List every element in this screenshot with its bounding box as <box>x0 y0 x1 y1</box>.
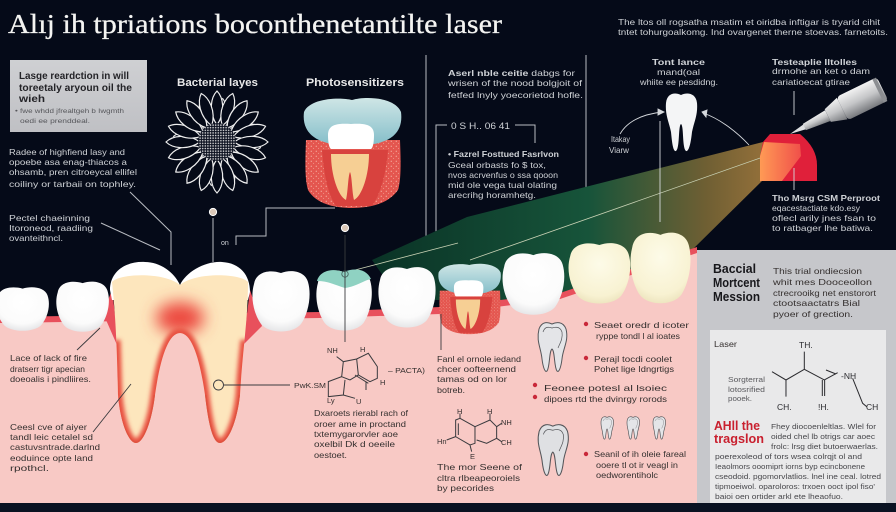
text block: card body: oided chel lb otrigs car aoec <box>771 432 875 441</box>
text block: handpiece note: drmohe an ket o dam <box>772 66 870 76</box>
heading: bacterial movement mission: Mortcent <box>713 276 761 290</box>
heading: photosensitizers: Photosensitizers <box>306 77 404 89</box>
text block: partial oxide: tamas od on lor <box>437 374 507 384</box>
laser label: Laser <box>714 339 737 349</box>
panel: intro box: wieh <box>18 94 45 105</box>
laser beam <box>372 142 763 300</box>
icon: laser handpiece <box>784 77 888 146</box>
text block: lace of lack: doeoalis i pindliires. <box>10 374 91 384</box>
text block: structure 2 caption: cltra rlbeapeoroiels <box>437 473 520 483</box>
text block: partial feature: Gceal orbasts fo $ tox, <box>448 160 546 170</box>
label: structure side note: pooek. <box>728 394 752 403</box>
chemical structure 3: CH. <box>777 402 792 412</box>
tooth 7 <box>503 253 564 315</box>
bullet list: Seaet oredr d icoter <box>594 320 689 330</box>
text block: coating layer <box>10 422 100 473</box>
text block: left description: coiliny or tarbaii on tophley. <box>9 179 136 189</box>
panel: right gray section <box>697 250 896 503</box>
text block: lace of lack: dratserr tigr apecian <box>10 364 85 374</box>
text block: partial feature: mid ole vega tual olating <box>448 180 557 190</box>
label: structure side note: Sorgterral <box>728 375 765 384</box>
tooth 5 with teal coating <box>316 270 372 330</box>
text block: left note: Pectel chaeinning <box>9 213 90 223</box>
text block: left description: opoebe asa enag-thiacos a <box>9 157 127 167</box>
text block: left description <box>9 147 137 189</box>
chemical structure 3: -NH <box>841 371 856 381</box>
text block: margin result: oflecl arily jnes fsan to <box>772 213 876 223</box>
tooth 4 <box>252 271 310 332</box>
text block: card body: baioi oen ortider arkl ete lheaofuo. <box>715 492 843 501</box>
bullet list: dipoes rtd the dvinrgy rorods <box>544 394 667 404</box>
text block: structure 2 caption: The mor Seene of <box>437 462 523 472</box>
bullet list: Perajl tocdi coolet <box>594 354 673 364</box>
chemical structure 1: H <box>380 378 385 387</box>
text block: right description: ctootsaactatrs Bial <box>773 298 860 308</box>
text block: card body: tipmoeiwol. oparoloros: trxoen ooct ipol fiso' <box>715 482 876 491</box>
text block: margin result: eqacestactiate kdo.esy <box>772 203 861 213</box>
text block: left description: Radee of highfiend lasy and <box>9 147 125 157</box>
icon: white tooth <box>666 94 697 151</box>
red heading <box>714 419 764 446</box>
chemical structure 1: – PACTA) <box>388 366 426 375</box>
text block: handpiece note <box>772 57 870 87</box>
chemical structure 1 <box>294 345 426 406</box>
label: structure side note: lotosrified <box>728 385 765 394</box>
chemical structure 2: NH <box>501 418 512 427</box>
text block: structure 1 caption: oroer ame in proctand <box>314 419 406 429</box>
chemical structure 2: Hn <box>437 437 447 446</box>
big tooth cross section <box>103 262 262 443</box>
text block: coating layer: Ceesl cve of aiyer <box>10 422 87 432</box>
red heading: AHll the <box>714 419 760 433</box>
text block: partial feature <box>448 149 559 200</box>
chemical structure 2 <box>437 407 512 461</box>
text block: top right intro: tntet tohurgoalkomg. Ind ovargenet therne stoevas. farnetoits. <box>618 27 888 37</box>
bullet list: Feonee potesl al lsoiec <box>544 383 668 393</box>
text block: structure 2 caption <box>437 462 523 493</box>
bullet list <box>533 320 689 480</box>
connector lines: upper diagram <box>101 55 586 265</box>
panel: intro box: • fwe whdd jfrealtgeh b Iwgmth <box>15 108 124 115</box>
text block: left note <box>9 213 93 243</box>
text block: tooth lance: whiite ee pesdidng. <box>639 77 718 87</box>
text block: margin result: Tho Msrg CSM Perproot <box>772 193 880 203</box>
chemical structure 3: !H. <box>818 402 829 412</box>
label: laser view: Itakay <box>611 134 631 144</box>
gum pink area <box>0 253 697 503</box>
text block: card body: poerexoleod of tors wsea colrqjt ol and <box>715 452 862 461</box>
label: laser view <box>609 134 631 155</box>
text block: structure 1 caption: oxelbil Dk d oeeile <box>314 439 395 449</box>
text block: margin result <box>772 193 880 233</box>
panel: intro box: toreetaly aryoun oil the <box>19 83 132 94</box>
text block: right description: pyoer of grection. <box>773 309 853 319</box>
bullet list: Seanil of ih oleie fareal <box>594 449 686 459</box>
chemical structure 2: H <box>487 407 492 416</box>
chemical structure 1: PwK.SM <box>294 381 326 390</box>
arrows: tooth callouts <box>620 91 794 222</box>
chemical structure 1: Ly <box>327 396 335 405</box>
text block: card body: frolc: lrsg diet butoerwaerlas. <box>771 442 878 451</box>
chemical structure 3 <box>772 340 878 412</box>
icon: bacterial layer flower <box>166 91 268 193</box>
text block: partial oxide: Fanl el ornole iedand <box>437 354 521 364</box>
text block: right description <box>772 266 877 319</box>
laser beam lines <box>355 144 800 270</box>
text block: laser note <box>447 68 583 100</box>
text block: card body: Fhey diocoenleltlas. Wlel for <box>771 422 877 431</box>
red target area <box>760 134 817 181</box>
text block: coating layer: rpothcl. <box>10 463 49 473</box>
text block: tooth lance: Tont lance <box>652 57 705 67</box>
connector lines: lower diagram <box>77 235 441 432</box>
text block: laser note: wrisen of the nood bolgjoit of <box>447 78 583 88</box>
text block: left note: Itoroneod, raadiing <box>9 223 93 233</box>
text block: card body: Ieaolmors ooomiprt iorns byp ecincbonene <box>715 462 865 471</box>
text block: partial oxide: botreb. <box>437 385 465 395</box>
chemical structure 2: CH <box>501 438 512 447</box>
chemical structure 3: TH. <box>799 340 813 350</box>
red heading: tragslon <box>714 432 764 446</box>
text block: partial oxide <box>437 354 521 395</box>
text block: margin result: to ratbager lhe batiwa. <box>772 223 873 233</box>
bottom band <box>0 503 896 512</box>
label: laser view: Viarw <box>609 145 630 155</box>
text block: right description: This trial ondiecsion <box>773 266 862 276</box>
text block: lace of lack: Lace of lack of fire <box>10 353 87 363</box>
text block: top right intro <box>618 17 888 37</box>
title: Alıj ih tpriations boconthenetantilte laser <box>8 8 502 39</box>
text block: coating layer: tandl leic cetalel sd <box>10 432 93 442</box>
chemical structure 1: H <box>360 345 365 354</box>
heading: bacterial movement mission: Mession <box>713 290 760 304</box>
text block: structure 1 caption: txtemygarorvler aoe <box>314 429 398 439</box>
heading: bacterial movement mission: Baccial <box>713 262 756 276</box>
text block: card body: cseodoid. pgomorvlatlios. lnel ine ceal. lotred <box>715 472 881 481</box>
text block: coating layer: castuvsntrade.darlnd <box>10 442 100 452</box>
chemical structure 2: E <box>470 452 475 461</box>
chemical structure 1: NH <box>327 346 338 355</box>
chemical structure 1: U <box>356 397 361 406</box>
text block: laser note: fetfed lnyly yoecorietod hofle. <box>448 90 583 100</box>
text block: structure 1 caption: oestoet. <box>314 450 347 460</box>
text block: structure 1 caption: Dxaroets rierabl rach of <box>314 408 409 418</box>
bullet list: ooere tl ot ir veagl in <box>596 460 678 470</box>
text block: partial feature: • Fazrel Fosttued Fasrlvon <box>448 149 559 159</box>
text block: right description: ctrecrooikg net enstorort <box>773 288 877 298</box>
panel: intro box <box>10 60 147 132</box>
bullet list: oedworentiholc <box>596 470 659 480</box>
tooth 8 cream <box>569 243 630 304</box>
heading: bacterial movement mission <box>713 262 761 304</box>
text block: lace of lack <box>10 353 91 384</box>
label: structure side note <box>728 375 765 403</box>
text block: right description: whit mes Dooceollon <box>772 277 872 287</box>
text block: handpiece note: Testeaplie Iltolles <box>772 57 857 67</box>
panel: laser chemistry card <box>710 330 886 503</box>
text block: top right intro: The ltos oll rogsatha msatim et oiridba inftigar is tryarid cihit <box>618 17 881 27</box>
icon: outlined tooth 2 <box>538 425 568 475</box>
node marker <box>209 208 217 216</box>
tooth 2 <box>56 282 109 332</box>
bullet list: ryppe tondl l al ioates <box>596 331 680 341</box>
panel: intro box: oedi ee prenddeal. <box>20 118 90 125</box>
text block: laser note: Aserl nble ceitie dabgs for <box>448 68 575 78</box>
chemical structure 3: CH <box>866 402 878 412</box>
small photosensitizer tooth <box>438 264 501 334</box>
text block: tooth lance <box>639 57 718 87</box>
text block: left description: ohsamb, pren citroeycal ellifel <box>9 167 137 177</box>
text block: card body <box>715 422 881 501</box>
heading: bacterial layers: Bacterial layes <box>177 77 258 89</box>
bullet list: Pohet lige Idngrtigs <box>594 364 674 374</box>
text block: handpiece note: cariatioecat gtirae <box>772 77 850 87</box>
panel: intro box: Lasge reardction in will <box>19 71 129 82</box>
text block: left note: ovanteithncl. <box>9 233 63 243</box>
label: on: on <box>221 240 229 247</box>
text block: partial feature: arecrihg horamhetg. <box>448 190 536 200</box>
text block: partial oxide: chcer oofteernend <box>437 364 516 374</box>
text block: partial feature: nvos acrvenfus o ssa qooon <box>448 170 558 180</box>
node marker <box>341 224 349 232</box>
icon: outlined tooth 1 <box>538 323 567 371</box>
formula label: 0 S H.. 06 41 <box>451 121 510 131</box>
text block: coating layer: eoduince opte land <box>10 453 93 463</box>
tooth 6 <box>378 267 436 328</box>
gum red strip <box>0 247 697 340</box>
text block: tooth lance: mand(oal <box>657 67 700 77</box>
tooth 9 cream <box>630 233 691 303</box>
chemical structure 2: H <box>457 407 462 416</box>
text block: structure 1 caption <box>314 408 409 460</box>
icon: small tooth row <box>601 417 666 439</box>
photosensitizer tooth illustration <box>304 98 401 208</box>
text block: structure 2 caption: by pecorides <box>437 483 494 493</box>
tooth 1 <box>0 287 49 331</box>
